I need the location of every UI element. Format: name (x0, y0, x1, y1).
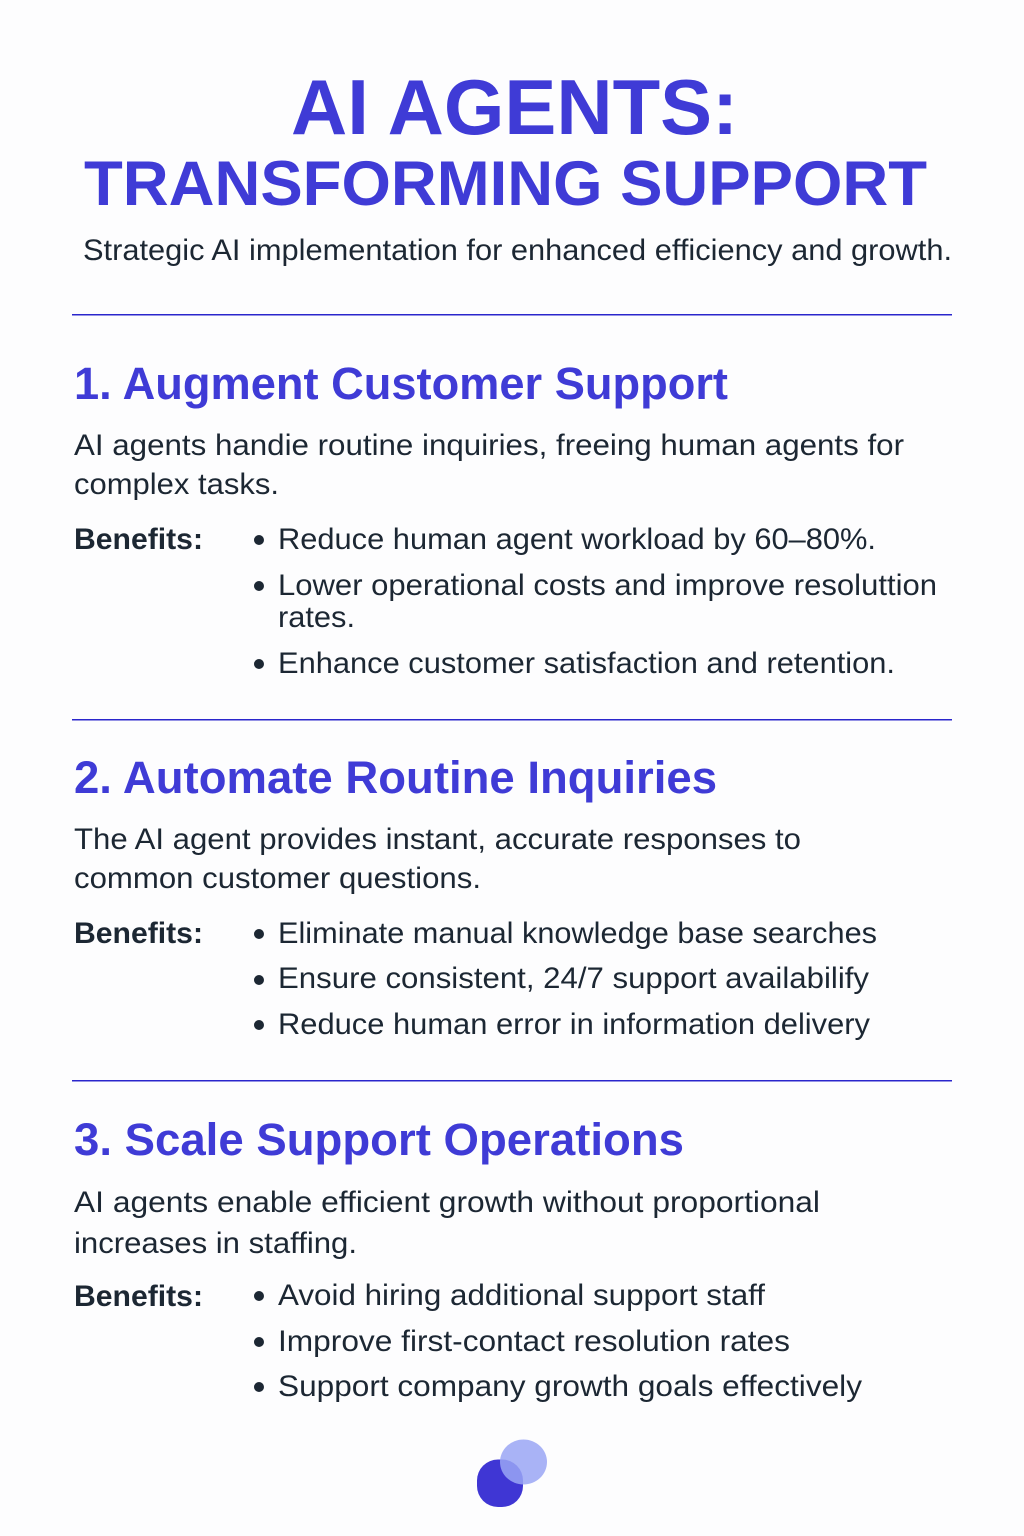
benefits list 2: Reduce human error in information delivery (278, 1008, 870, 1041)
panel: section 3 scale support operations (74, 1114, 862, 1403)
benefits list 1: Lower operational costs and improve resoluttion (278, 569, 937, 602)
subtitle: Strategic AI implementation for enhanced efficiency and growth. (83, 234, 952, 267)
benefits list 1: Reduce human agent workload by 60–80%. (278, 523, 876, 556)
label: benefits 2: Benefits: (74, 917, 203, 950)
description: section 1: complex tasks. (74, 468, 279, 501)
description: section 1: AI agents handie routine inquiries, freeing human agents for (74, 429, 904, 462)
benefits list 1: Enhance customer satisfaction and retention. (278, 647, 895, 680)
description: section 3: AI agents enable efficient growth without proportional (74, 1186, 820, 1219)
description: section 1 (74, 429, 904, 501)
description: section 3: increases in staffing. (74, 1227, 357, 1260)
benefits list 3: Avoid hiring additional support staff (278, 1279, 766, 1312)
heading: section 1: 1. Augment Customer Support (74, 358, 728, 409)
benefits list 1: rates. (278, 601, 355, 634)
benefits list 2: Eliminate manual knowledge base searches (278, 917, 877, 950)
benefits list 3: Improve first-contact resolution rates (278, 1325, 790, 1358)
panel: section 1 augment customer support (74, 358, 937, 680)
title: AI AGENTS: (291, 63, 738, 151)
benefits list 2 (254, 917, 877, 1041)
heading: section 2: 2. Automate Routine Inquiries (74, 752, 717, 803)
description: section 2: common customer questions. (74, 862, 481, 895)
heading: section 3: 3. Scale Support Operations (74, 1114, 684, 1165)
description: section 3 (74, 1186, 820, 1260)
icon: overlapping logo shapes (477, 1440, 547, 1507)
benefits list 1 (254, 523, 937, 680)
label: benefits 3: Benefits: (74, 1280, 203, 1313)
title: TRANSFORMING SUPPORT (84, 149, 927, 219)
label: benefits 1: Benefits: (74, 523, 203, 556)
benefits list 3: Support company growth goals effectively (278, 1370, 862, 1403)
description: section 2 (74, 823, 801, 895)
description: section 2: The AI agent provides instant, accurate responses to (74, 823, 801, 856)
benefits list 3 (254, 1279, 862, 1403)
title (84, 63, 927, 219)
panel: section 2 automate routine inquiries (74, 752, 877, 1041)
benefits list 2: Ensure consistent, 24/7 support availabilify (278, 962, 869, 995)
